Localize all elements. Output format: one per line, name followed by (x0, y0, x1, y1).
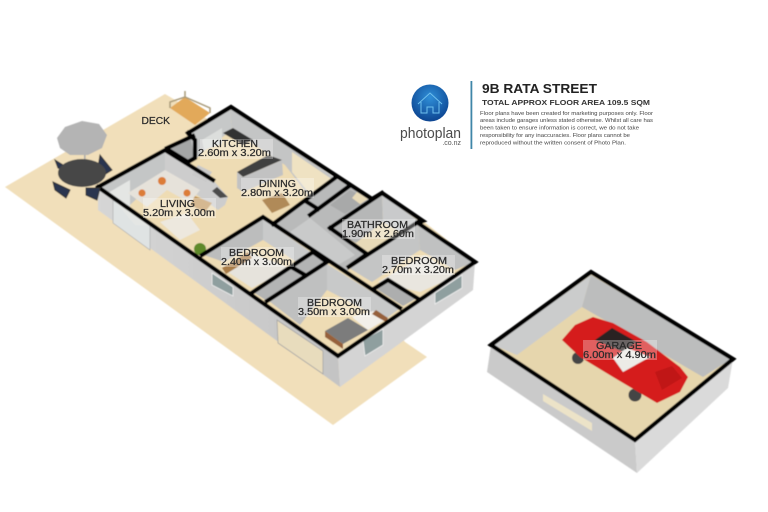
label: bedroom 3.50: 3.50m x 3.00m (298, 307, 370, 318)
room: bathroom (332, 195, 420, 254)
label: garage (583, 340, 657, 361)
closets between bedrooms (253, 252, 327, 301)
logo: photoplan (400, 84, 461, 147)
label: deck: DECK (142, 116, 170, 127)
house floor (98, 107, 475, 356)
label: kitchen (198, 139, 273, 159)
label: bathroom: BATHROOM (347, 220, 408, 231)
interior and exterior wall tops (98, 107, 475, 356)
deck ground (5, 94, 427, 425)
logo: photoplan: .co.nz (442, 140, 461, 147)
icon: deck bench (170, 91, 210, 125)
garage inner walls (493, 275, 731, 377)
room: kitchen and dining walls (190, 107, 335, 213)
subtitle: TOTAL APPROX FLOOR AREA 109.5 SQM (482, 98, 650, 107)
label: bedroom 2.70: 2.70m x 3.20m (382, 265, 454, 276)
disclaimer text: responsibility for any inaccuracies. Floor plans cannot be (480, 133, 630, 139)
label: bathroom (342, 219, 415, 240)
disclaimer text: areas include garages unless stated otherwise. Whilst all care has (480, 118, 653, 124)
disclaimer text (480, 111, 653, 146)
room: living (100, 150, 228, 255)
room: bedroom 2.40 (204, 219, 312, 288)
label: bedroom 2.40: 2.40m x 3.00m (221, 257, 292, 268)
label: bathroom: 1.90m x 2.60m (342, 229, 414, 240)
label: garage: 6.00m x 4.90m (583, 350, 656, 361)
room: closet beside kitchen (167, 136, 195, 162)
label: bedroom 2.40 (221, 247, 294, 268)
label: bedroom 2.40: BEDROOM (229, 248, 284, 259)
label: dining: 2.80m x 3.20m (241, 188, 313, 199)
label: bedroom 3.50: BEDROOM (307, 298, 362, 309)
logo: photoplan: photoplan (400, 125, 461, 142)
divider line (470, 81, 472, 149)
title: 9B RATA STREET (482, 81, 597, 96)
label: dining (241, 178, 314, 199)
label: dining: DINING (259, 179, 296, 190)
disclaimer text: reproduced without the written consent of Photo Plan. (480, 140, 626, 146)
disclaimer text: been taken to ensure information is correct, we do not take (480, 126, 639, 132)
label: living: LIVING (160, 199, 195, 210)
garage exterior walls (487, 345, 733, 473)
room labels (142, 116, 657, 361)
label: living: 5.20m x 3.00m (143, 208, 215, 219)
icon: outdoor table with umbrella (53, 121, 112, 200)
panel: garage (487, 272, 733, 473)
label: bedroom 3.50 (298, 297, 371, 318)
room: corridor and closets (273, 178, 372, 271)
label: kitchen: 2.60m x 3.20m (198, 148, 271, 159)
icon: blue house ball (412, 84, 448, 122)
label: bedroom 2.70: BEDROOM (391, 256, 447, 267)
icon: red car (562, 317, 688, 403)
room: bedroom 2.70 (349, 224, 474, 306)
panel: house floor plan (5, 91, 475, 425)
label: garage: GARAGE (596, 341, 642, 352)
heading block (482, 81, 650, 107)
garage floor (491, 272, 733, 440)
disclaimer text: Floor plans have been created for marketing purposes only. Floor (480, 111, 653, 117)
room: bedroom 3.50 (269, 264, 399, 349)
label: living (143, 198, 216, 219)
garage wall tops (491, 272, 733, 440)
label: kitchen: KITCHEN (212, 139, 258, 150)
exterior walls (98, 187, 475, 387)
label: bedroom 2.70 (382, 255, 455, 276)
